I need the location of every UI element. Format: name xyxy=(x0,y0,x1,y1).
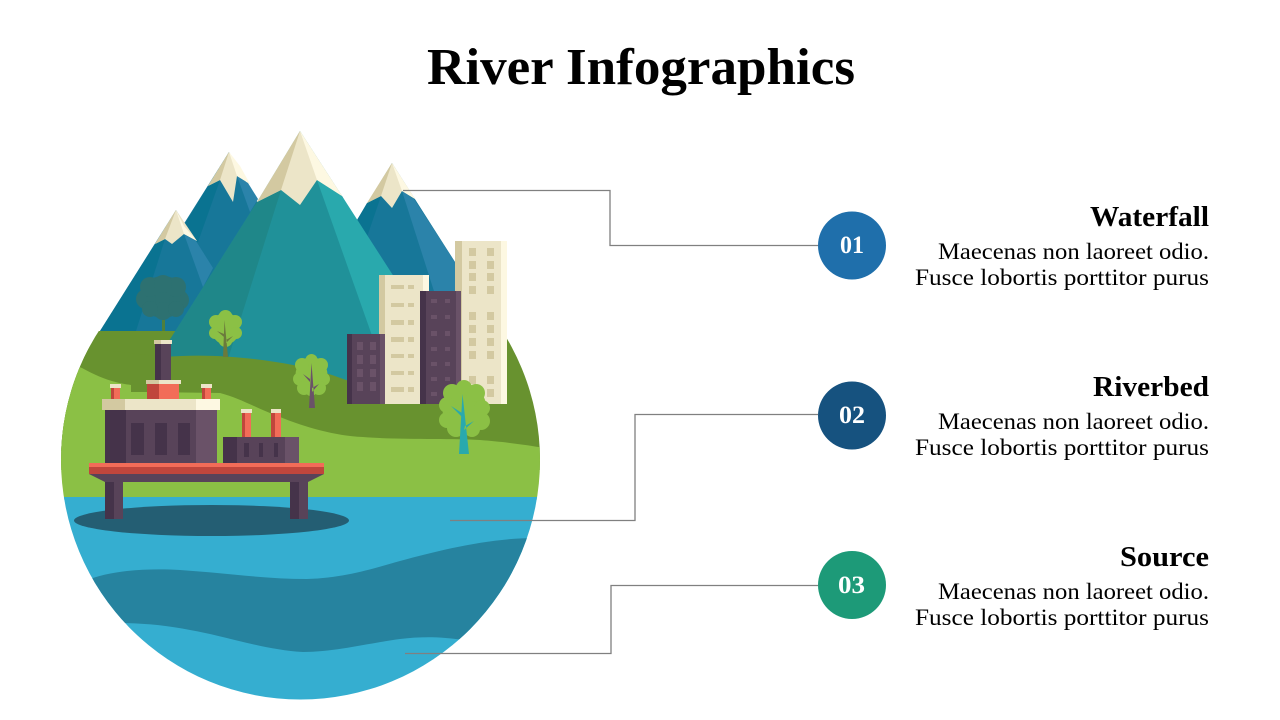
mountain: back left xyxy=(100,152,500,400)
item 03: Source xyxy=(818,542,1209,630)
connector 1 xyxy=(403,190,818,246)
body: Source: Maecenas non laoreet odio. xyxy=(938,579,1209,604)
body: Source xyxy=(915,579,1209,630)
river: dark wave band xyxy=(85,538,535,652)
buildings xyxy=(347,241,507,404)
body: Waterfall xyxy=(915,239,1209,290)
body: Waterfall: Fusce lobortis porttitor purus xyxy=(915,265,1209,290)
ground: far dark green xyxy=(61,331,176,451)
tree: large teal trunk xyxy=(439,380,490,454)
tree: dark background xyxy=(136,275,189,345)
connector 3 xyxy=(405,586,818,654)
badge 02 xyxy=(818,382,886,450)
badge 01: 01 xyxy=(840,232,864,259)
item 02: Riverbed xyxy=(818,372,1209,460)
tree: medium green xyxy=(293,354,330,408)
badge 03: 03 xyxy=(838,572,865,599)
ground: dark green hill xyxy=(61,338,540,470)
water shadow xyxy=(74,505,349,536)
body: Riverbed: Maecenas non laoreet odio. xyxy=(938,409,1209,434)
badge 01 xyxy=(818,212,886,280)
badge 03 xyxy=(818,551,886,619)
heading: Riverbed: Riverbed xyxy=(1093,372,1209,403)
title: River Infographics xyxy=(427,39,855,96)
connector 2 xyxy=(450,414,818,520)
item 01: Waterfall xyxy=(818,202,1209,290)
ground: light green foreground xyxy=(55,358,545,500)
oil platform xyxy=(89,340,324,519)
tree: small green xyxy=(209,310,242,357)
badge 02: 02 xyxy=(839,402,865,429)
body: Waterfall: Maecenas non laoreet odio. xyxy=(938,239,1209,264)
heading: Waterfall: Waterfall xyxy=(1090,202,1209,233)
heading: Source: Source xyxy=(1120,542,1209,573)
body: Source: Fusce lobortis porttitor purus xyxy=(915,605,1209,630)
river xyxy=(55,497,545,707)
body: Riverbed: Fusce lobortis porttitor purus xyxy=(915,435,1209,460)
illustration: water drop landscape xyxy=(55,131,560,707)
mountain: main xyxy=(157,131,470,410)
body: Riverbed xyxy=(915,409,1209,460)
